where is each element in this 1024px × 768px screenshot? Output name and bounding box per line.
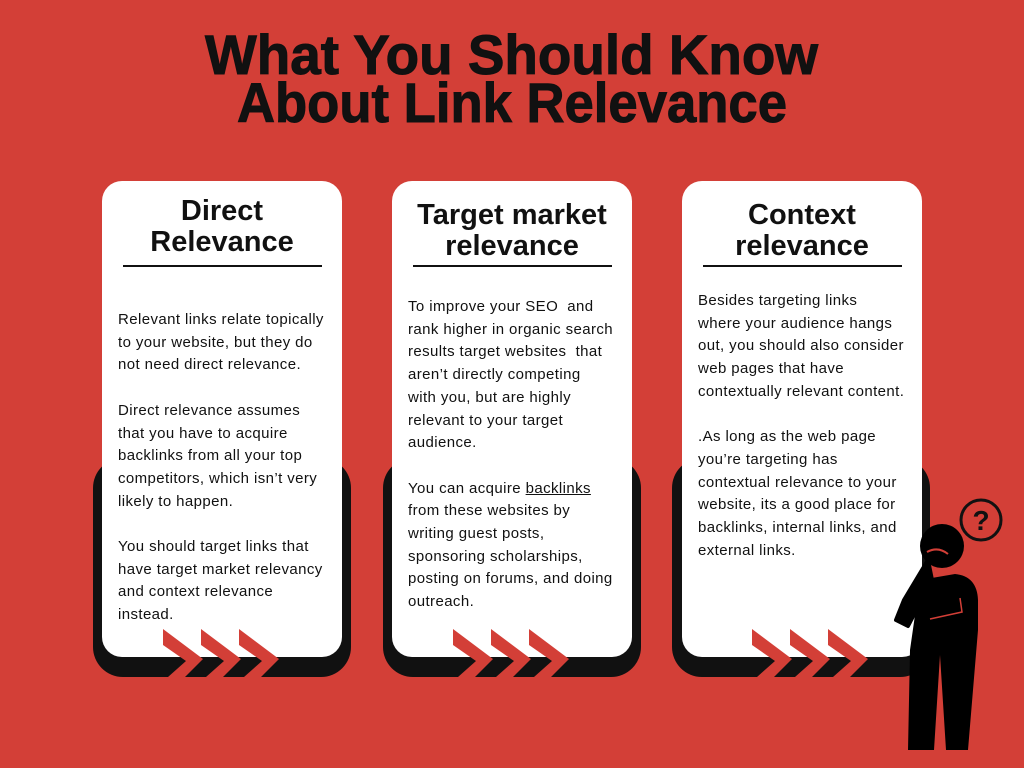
panel: direct relevance bbox=[102, 181, 342, 657]
question mark bubble bbox=[961, 500, 1001, 540]
text block: outreach. bbox=[408, 593, 474, 610]
heading: Direct bbox=[181, 195, 263, 227]
backing shape: card 3 bbox=[672, 458, 930, 677]
heading: Context bbox=[748, 199, 856, 231]
text block: competitors, which isn’t very bbox=[118, 470, 317, 487]
backing shape: card 1 bbox=[93, 458, 351, 677]
text block: Relevant links relate topically bbox=[118, 311, 324, 328]
text block: likely to happen. bbox=[118, 493, 233, 510]
text block: rank higher in organic search bbox=[408, 321, 613, 338]
text block: where your audience hangs bbox=[698, 315, 892, 332]
text block: website, its a good place for bbox=[698, 496, 896, 513]
text block: backlinks from all your top bbox=[118, 447, 302, 464]
heading bbox=[417, 199, 607, 262]
text block: To improve your SEO and bbox=[408, 298, 594, 315]
text block: audience. bbox=[408, 434, 477, 451]
text block: aren’t directly competing bbox=[408, 366, 581, 383]
heading: Target market bbox=[417, 199, 607, 231]
title: What You Should Know bbox=[205, 23, 818, 86]
text block: relevant to your target bbox=[408, 412, 563, 429]
heading bbox=[150, 195, 294, 258]
text block: to your website, but they do bbox=[118, 334, 313, 351]
text block: that you have to acquire bbox=[118, 424, 288, 442]
text block: You should target links that bbox=[118, 538, 309, 555]
heading bbox=[735, 199, 869, 262]
text block: posting on forums, and doing bbox=[408, 570, 613, 587]
panel: context relevance bbox=[682, 181, 922, 657]
text block: out, you should also consider bbox=[698, 337, 904, 354]
heading: relevance bbox=[445, 230, 579, 262]
text block: You can acquire backlinks bbox=[408, 480, 591, 497]
text block: instead. bbox=[118, 606, 174, 623]
text block: results target websites that bbox=[408, 343, 602, 360]
icon: thinking person bbox=[894, 498, 1002, 750]
text block bbox=[118, 311, 324, 623]
heading: Relevance bbox=[150, 226, 294, 258]
text block: sponsoring scholarships, bbox=[408, 548, 583, 565]
panel: target market relevance bbox=[392, 181, 632, 657]
text block: from these websites by bbox=[408, 502, 570, 519]
text block bbox=[698, 292, 904, 559]
text block: .As long as the web page bbox=[698, 428, 876, 445]
text block bbox=[408, 298, 613, 610]
text block: writing guest posts, bbox=[408, 525, 544, 542]
backing shape: card 2 bbox=[383, 458, 641, 677]
heading: relevance bbox=[735, 230, 869, 262]
text block: with you, but are highly bbox=[408, 389, 571, 406]
text block: contextually relevant content. bbox=[698, 383, 904, 400]
text block: and context relevance bbox=[118, 583, 273, 600]
text block: Besides targeting links bbox=[698, 292, 857, 309]
text block: external links. bbox=[698, 542, 796, 559]
text block: have target market relevancy bbox=[118, 561, 323, 578]
text block: you’re targeting has bbox=[698, 451, 838, 468]
text block: not need direct relevance. bbox=[118, 356, 301, 373]
text block: contextual relevance to your bbox=[698, 474, 897, 491]
text block: backlinks, internal links, and bbox=[698, 519, 897, 536]
text block: web pages that have bbox=[698, 360, 844, 377]
text block: Direct relevance assumes bbox=[118, 402, 300, 419]
question mark bubble: ? bbox=[972, 505, 990, 536]
title bbox=[204, 23, 819, 134]
title: About Link Relevance bbox=[237, 71, 787, 134]
